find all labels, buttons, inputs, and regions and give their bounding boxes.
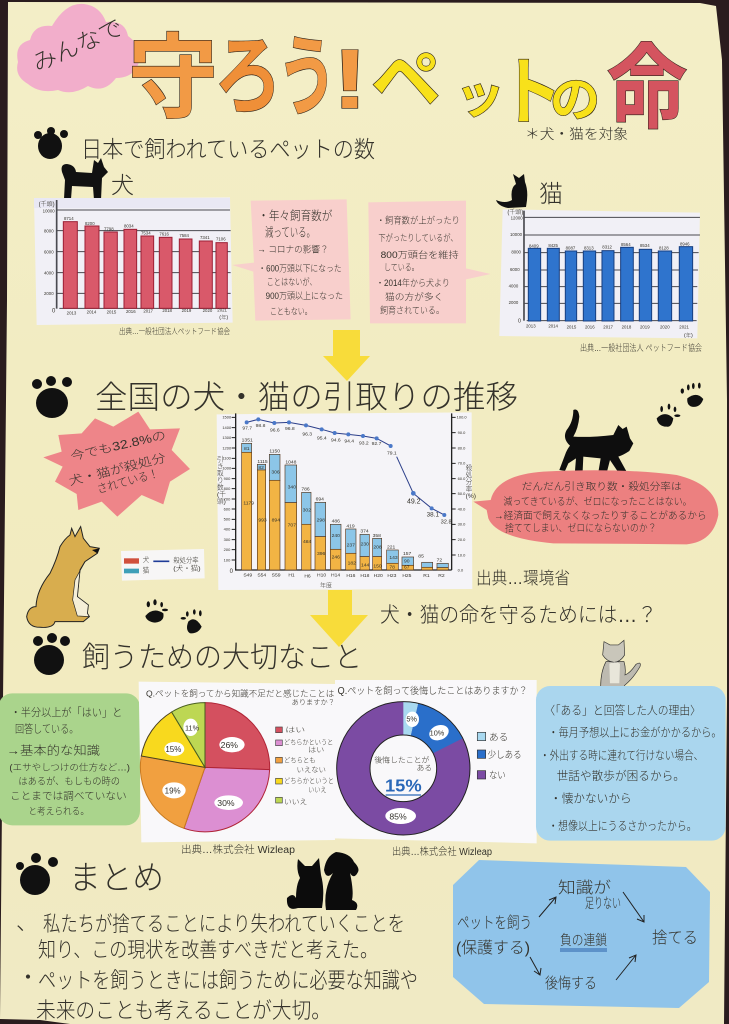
title: 守ろう!ペットの命: 命 xyxy=(607,38,687,140)
panel: donut chart regret: 少しある xyxy=(488,750,522,761)
title: 守ろう!ペットの命: ッ xyxy=(455,70,505,123)
chart value labels: R1 xyxy=(423,573,430,579)
chart value labels: 60.0 xyxy=(458,476,466,481)
dog chart labels: 7798 xyxy=(104,226,114,231)
panel: green commentary: と考えられる。 xyxy=(28,806,89,817)
title cloud: みんなで: みんなで xyxy=(28,14,127,77)
note: dog commentary: 900万頭以上になった xyxy=(266,291,343,301)
dog chart labels: 10000 xyxy=(43,209,55,214)
dog chart labels: 2014 xyxy=(87,310,97,315)
chart value labels: 頭) xyxy=(217,498,226,506)
cat chart labels: 8534 xyxy=(640,243,650,248)
cat chart labels: 8946 xyxy=(680,241,690,246)
chart value labels: 157 xyxy=(403,551,412,557)
panel: pie chart knowledge: 30% xyxy=(217,798,235,808)
chart value labels: 0.0 xyxy=(458,567,464,572)
cat chart labels: 2017 xyxy=(603,325,614,330)
chart value labels: 246 xyxy=(332,554,340,560)
chart value labels: 70.0 xyxy=(458,461,466,466)
panel: donut chart regret: ない xyxy=(489,771,506,782)
text: summary: ・ xyxy=(17,965,39,990)
chart value labels: H23 xyxy=(387,573,397,579)
chart value labels: 700 xyxy=(224,496,231,501)
text: summary: 未来のことも考えることが大切。 xyxy=(36,998,331,1023)
panel: green commentary xyxy=(0,693,140,825)
heading: 日本で飼われているペットの数: 日本で飼われているペットの数 xyxy=(81,136,375,162)
chart value labels: 率 xyxy=(466,485,473,493)
panel: pie chart knowledge: 19% xyxy=(165,787,181,796)
chart value labels: 1500 xyxy=(222,415,232,420)
chart value labels: 92.7 xyxy=(372,441,382,447)
chart value labels: 95.4 xyxy=(317,436,327,442)
chart value labels: 72 xyxy=(437,558,442,564)
chart value labels: 374 xyxy=(360,529,369,535)
cat chart labels: 0 xyxy=(518,318,521,324)
chart value labels: 引 xyxy=(217,455,224,464)
dog chart labels: 8000 xyxy=(44,228,54,233)
illustration: grey cat xyxy=(601,640,640,687)
chart value labels: H16 xyxy=(346,573,356,579)
callout: salmon speech bubble: だんだん引き取り数・殺処分率は xyxy=(522,480,682,493)
source: dogs: 出典…一般社団法人ペットフード協会 xyxy=(119,326,230,336)
cat chart labels: 8087 xyxy=(566,245,576,250)
chart value labels: 50.0 xyxy=(458,491,466,496)
dog chart labels: 2020 xyxy=(203,308,213,313)
chart value labels: H20 xyxy=(374,573,383,579)
callout: salmon speech bubble: →経済面で飼えなくなったりすることがあるから xyxy=(494,510,707,522)
cat chart labels: 10000 xyxy=(510,232,523,237)
source: ministry of environment: 出典…環境省 xyxy=(476,569,570,588)
chart value labels: 419 xyxy=(346,523,355,529)
chart value labels: 96.3 xyxy=(302,432,312,438)
panel: donut chart regret: ある xyxy=(489,732,508,743)
chart value labels: 694 xyxy=(316,497,324,503)
chart value labels: 298 xyxy=(317,518,325,524)
chart value labels: 90 xyxy=(404,558,410,564)
chart value labels: 300 xyxy=(224,537,231,542)
donut chart xyxy=(353,718,453,818)
callout: starburst 32.8%: 今でも32.8%の xyxy=(69,428,167,464)
heading: 飼うための大切なこと: 飼うための大切なこと xyxy=(82,641,362,674)
text: summary: ペットを飼うときには飼うために必要な知識や xyxy=(38,968,418,993)
chart value labels: 1300 xyxy=(222,435,232,440)
chart value labels: 500 xyxy=(224,517,231,522)
chart value labels: 82 xyxy=(258,465,264,471)
panel: pie chart knowledge: はい xyxy=(308,746,325,754)
text: summary: 、 xyxy=(16,910,38,935)
chart value labels: 0 xyxy=(230,569,234,575)
chart value labels: 100.0 xyxy=(457,415,467,420)
pie chart xyxy=(140,703,270,832)
icon: small paws top right xyxy=(657,383,703,427)
dog chart labels: (年) xyxy=(219,313,228,321)
panel: green commentary: 回答している。 xyxy=(15,722,78,736)
panel: donut chart regret: 5% xyxy=(406,715,417,724)
chart value labels: R2 xyxy=(438,573,445,579)
title: 守ろう!ペットの命: う xyxy=(277,28,337,127)
icon: black cat silhouette xyxy=(496,174,527,208)
panel: pie chart knowledge: いえない xyxy=(297,766,326,774)
chart value labels: 32.8 xyxy=(441,520,452,526)
dog chart labels: (千頭) xyxy=(39,200,55,208)
icon: paw 4 xyxy=(16,853,58,895)
chart value labels: 80.0 xyxy=(458,445,466,450)
dog chart labels: 8200 xyxy=(85,221,95,226)
note: cat commentary: 800万頭台を維持 xyxy=(381,249,459,260)
dog chart labels: 2019 xyxy=(182,308,192,313)
chart value labels: 取 xyxy=(217,470,224,478)
chart value labels xyxy=(217,415,476,589)
icon: paw 1 xyxy=(34,127,68,159)
chart value labels: 1100 xyxy=(222,456,232,461)
chart value labels: 230 xyxy=(361,542,369,548)
label: 犬: 犬 xyxy=(111,172,134,198)
chart value labels: 81 xyxy=(244,446,250,452)
note: dog commentary: ・年々飼育数が xyxy=(258,209,332,223)
cat chart labels: 2019 xyxy=(640,325,650,330)
chart value labels: 484 xyxy=(303,539,312,545)
cycle arrows xyxy=(530,892,644,980)
dog chart labels: 2013 xyxy=(67,311,77,316)
dog bars xyxy=(63,222,227,308)
panel: green commentary: →基本的な知識 xyxy=(7,743,100,758)
dog chart labels: 2000 xyxy=(44,291,54,296)
sources: Wizleap xyxy=(181,843,492,858)
illustration: shiba dog xyxy=(27,527,99,627)
panel: pie chart knowledge: いいえ xyxy=(284,798,307,806)
title: 守ろう!ペットの命: ! xyxy=(332,32,368,126)
sources: Wizleap: 出典…株式会社 Wizleap xyxy=(181,843,295,856)
chart value labels: S54 xyxy=(257,572,266,578)
panel: green commentary: ・半分以上が「はい」と xyxy=(11,706,122,719)
callout: salmon speech bubble xyxy=(473,470,718,544)
heading: まとめ: まとめ xyxy=(69,859,164,896)
chart value labels: 900 xyxy=(224,476,231,481)
chart value labels: 67 xyxy=(404,564,410,570)
chart value labels: 分 xyxy=(466,478,473,486)
title: 守ろう!ペットの命: ろ xyxy=(214,29,282,125)
title: 守ろう!ペットの命: ト xyxy=(500,51,562,134)
chart value labels: 78 xyxy=(389,564,395,570)
cat chart labels: 8128 xyxy=(659,245,669,250)
note: 犬・猫を対象: ＊犬・猫を対象 xyxy=(525,126,628,142)
icon: paw 2 xyxy=(32,376,72,418)
chart value labels: 殺 xyxy=(466,463,473,472)
panel: pie chart knowledge: はい xyxy=(285,726,306,734)
chart value labels: 486 xyxy=(332,519,340,525)
dog chart labels: 4000 xyxy=(44,270,54,275)
dog chart labels: 2017 xyxy=(143,308,154,313)
callout: starburst 32.8%: されている！ xyxy=(95,466,160,496)
text: summary xyxy=(16,910,418,1023)
dog chart labels: 7106 xyxy=(216,236,226,241)
callout: salmon speech bubble: 減ってきているが、ゼロになったことはない。 xyxy=(503,496,692,508)
heading: 全国の犬・猫の引取りの推移: 全国の犬・猫の引取りの推移 xyxy=(95,379,518,415)
cat chart labels: 2013 xyxy=(526,324,536,329)
note: dog commentary: → コロナの影響？ xyxy=(257,244,329,255)
cat bars xyxy=(528,247,693,321)
callout: starburst 32.8%: 犬・猫が殺処分 xyxy=(67,450,167,488)
chart value labels: S49 xyxy=(243,572,252,578)
panel: vicious cycle: 知識が xyxy=(558,879,611,897)
panel: pie chart knowledge: Q.ペットを飼ってから知識不足だと感じたことは xyxy=(146,688,335,699)
chart value labels: H14 xyxy=(331,572,340,578)
chart value labels: 10.0 xyxy=(458,552,466,557)
chart value labels: り xyxy=(217,477,224,485)
panel: reasons blue box xyxy=(536,686,726,841)
title: 守ろう!ペットの命: の xyxy=(550,74,600,127)
arrow: yellow down 1 xyxy=(323,330,370,381)
note: dog commentary xyxy=(232,199,351,321)
chart value labels: 600 xyxy=(224,506,231,511)
panel: green commentary: (エサやしつけの仕方など…) xyxy=(9,762,130,773)
cat chart labels: 8312 xyxy=(602,245,613,250)
panel: vicious cycle: 足りない xyxy=(585,895,621,911)
chart value labels: 85 xyxy=(418,554,424,560)
chart value labels: 340 xyxy=(288,484,296,490)
chart value labels: 707 xyxy=(288,523,296,529)
panel: pie chart knowledge: どちらかというと xyxy=(284,739,333,747)
cat chart labels: 2020 xyxy=(660,325,670,330)
chart value labels: き xyxy=(217,463,224,471)
line and stacked bar chart: withdrawals xyxy=(217,412,476,590)
chart value labels: 1200 xyxy=(222,445,232,450)
icon: black dog silhouette xyxy=(62,158,108,200)
note: dog commentary: こともない。 xyxy=(270,307,312,317)
donut labels: 後悔したことが xyxy=(374,754,430,764)
dog chart labels: 0 xyxy=(52,309,56,315)
dog chart labels: 2021 xyxy=(217,307,228,312)
illustration: cat and dog silhouettes xyxy=(287,852,358,910)
note: dog commentary: 減っている。 xyxy=(265,226,315,240)
chart value labels: 97.7 xyxy=(242,425,252,431)
chart value labels: 182 xyxy=(348,560,356,566)
chart value labels: 20.0 xyxy=(458,537,466,542)
note: cat commentary: している。 xyxy=(384,263,419,273)
chart value labels: (%) xyxy=(466,493,476,500)
panel: pie chart knowledge: どちらとも xyxy=(284,756,316,764)
sources: Wizleap: 出典…株式会社 Wizleap xyxy=(392,845,492,858)
note: cat commentary xyxy=(368,201,491,323)
panel: reasons blue box: 〈「ある」と回答した人の理由〉 xyxy=(544,703,701,717)
chart value labels: 1150 xyxy=(269,449,280,455)
chart value labels: 年度 xyxy=(320,581,332,589)
chart value labels: 396 xyxy=(317,551,326,557)
panel: reasons blue box: ・懐かないから xyxy=(550,792,632,806)
chart value labels: 400 xyxy=(224,527,231,532)
cat chart labels: 8425 xyxy=(548,243,559,248)
chart value labels: 90.0 xyxy=(458,430,466,435)
chart value labels: 1351 xyxy=(242,438,253,444)
cat chart labels: 2018 xyxy=(622,325,632,330)
label: 猫: 猫 xyxy=(539,181,563,208)
chart value labels: H25 xyxy=(402,573,412,579)
panel: donut chart regret xyxy=(335,680,537,843)
chart value labels: H10 xyxy=(317,572,326,578)
panel: vicious cycle: (保護する) xyxy=(456,939,530,957)
chart value labels: 800 xyxy=(224,486,231,491)
cat chart labels: 12000 xyxy=(511,215,523,220)
cat chart labels: 2014 xyxy=(548,324,559,329)
cat chart labels: 8564 xyxy=(621,242,631,247)
note: cat commentary: ・2014年から犬より xyxy=(376,277,450,288)
panel: pie chart knowledge: いいえ xyxy=(308,786,327,794)
dog chart labels: 7616 xyxy=(159,232,170,237)
cat chart labels: (年) xyxy=(684,331,693,339)
donut legend xyxy=(477,732,486,779)
chart value labels: 1048 xyxy=(285,460,297,466)
cat chart labels xyxy=(507,208,693,339)
chart value labels: 数 xyxy=(217,483,224,492)
bar chart: dogs xyxy=(34,197,233,325)
chart value labels: 221 xyxy=(387,544,396,550)
legend: withdrawals chart: 犬 xyxy=(143,555,150,564)
dog chart labels xyxy=(39,200,228,321)
dog chart labels: 2016 xyxy=(126,309,136,314)
chart value labels: H18 xyxy=(360,573,370,579)
title: 守ろう!ペットの命: 守 xyxy=(128,28,218,130)
legend: withdrawals chart: (犬・猫) xyxy=(173,564,201,573)
icon: small paws center left xyxy=(145,599,202,633)
donut labels xyxy=(374,754,432,796)
cat chart labels: 2021 xyxy=(679,325,690,330)
panel: donut chart regret: 85% xyxy=(389,811,407,821)
chart value labels: 302 xyxy=(303,508,311,514)
arrow: yellow down 2 xyxy=(310,590,368,647)
dog chart labels: 6000 xyxy=(44,249,54,254)
chart value labels: 1400 xyxy=(222,425,232,430)
chart value labels: 79.1 xyxy=(387,450,397,456)
chart value labels: 786 xyxy=(301,487,310,493)
chart value labels: 1000 xyxy=(222,466,232,471)
dog chart labels: 7341 xyxy=(200,235,210,240)
chart value labels: 144 xyxy=(361,562,370,568)
panel: green commentary: ことまでは調べていない xyxy=(10,790,127,802)
chart value labels: 1115 xyxy=(257,459,268,465)
chart value labels: 894 xyxy=(272,518,280,524)
chart value labels: 処 xyxy=(466,470,473,479)
note: dog commentary: ・600万頭以下になった xyxy=(258,263,342,273)
panel: reasons blue box: 世話や散歩が困るから。 xyxy=(557,770,685,783)
subheading: 犬・猫の命を守るためには: 犬・猫の命を守るためには…？ xyxy=(380,604,657,627)
chart value labels: 96.8 xyxy=(285,426,295,432)
cat chart labels: 4000 xyxy=(509,284,519,289)
legend: withdrawals chart xyxy=(121,549,205,581)
chart value labels: 96.6 xyxy=(270,427,280,433)
dog chart labels: 8714 xyxy=(64,216,74,221)
panel: green commentary: はあるが、もしもの時の xyxy=(18,776,120,788)
panel: pie chart knowledge: 11% xyxy=(185,723,200,732)
panel: pie chart knowledge: どちらかというと xyxy=(284,777,334,785)
dog chart labels: 7534 xyxy=(141,231,151,236)
panel: donut chart regret: 10% xyxy=(430,728,445,737)
chart value labels: 208 xyxy=(373,544,382,550)
panel: donut chart regret: Q.ペットを飼って後悔したことはありますか？ xyxy=(338,685,528,697)
cat chart labels: 2000 xyxy=(509,300,519,305)
chart value labels: 240 xyxy=(332,533,340,539)
note: cat commentary: 飼育されている。 xyxy=(380,305,444,315)
stacked bars: cats (blue) over dogs (orange) xyxy=(242,443,448,570)
panel: vicious cycle: 捨てる xyxy=(652,929,698,947)
cat chart labels: 6000 xyxy=(510,267,520,272)
pie legend xyxy=(276,727,282,803)
chart value labels: 143 xyxy=(389,555,398,561)
cat chart labels: (千頭) xyxy=(507,208,523,216)
chart value labels: 38.1 xyxy=(427,512,439,519)
chart value labels: 993 xyxy=(258,518,267,524)
cat chart labels: 2016 xyxy=(585,325,595,330)
panel: pie chart knowledge xyxy=(139,682,335,842)
panel: vicious cycle: 後悔する xyxy=(545,975,597,992)
panel: pie chart knowledge: 26% xyxy=(221,740,238,750)
chart value labels: 93.2 xyxy=(359,441,369,447)
text: summary: 知り、この現状を改善すべきだと考えた。 xyxy=(38,939,378,962)
note: dog commentary: ことはないが、 xyxy=(267,276,317,287)
dog chart labels: 7584 xyxy=(179,233,190,238)
legend: withdrawals chart: 殺処分率 xyxy=(173,555,199,564)
panel: pie chart knowledge: ありますか？ xyxy=(292,699,335,707)
chart value labels: 98.8 xyxy=(256,423,266,429)
dog chart labels: 2015 xyxy=(107,309,117,314)
panel: pie chart knowledge: 15% xyxy=(165,745,181,754)
note: cat commentary: 猫の方が多く xyxy=(385,291,443,302)
chart value labels: 30.0 xyxy=(458,522,466,527)
dog chart labels: 2018 xyxy=(162,308,173,313)
chart value labels: 150 xyxy=(373,563,382,569)
cat chart labels: 8313 xyxy=(584,245,594,250)
donut labels: ある xyxy=(417,764,432,773)
chart value labels: S59 xyxy=(272,572,281,578)
chart value labels: 100 xyxy=(224,557,231,562)
chart value labels: 1179 xyxy=(243,500,254,506)
chart value labels: H1 xyxy=(288,572,295,578)
bar chart: cats xyxy=(499,208,700,339)
callout: salmon speech bubble: 捨ててしまい、ゼロにならないのか？ xyxy=(505,522,657,535)
chart value labels: 49.2 xyxy=(407,498,421,505)
chart value labels: 358 xyxy=(373,533,381,539)
legend: withdrawals chart: 猫 xyxy=(143,566,150,575)
chart value labels: 306 xyxy=(271,470,280,476)
cat chart labels: 8000 xyxy=(511,249,522,254)
cat chart labels: 8409 xyxy=(529,243,539,248)
title: 守ろう!ペットの命: ペ xyxy=(371,43,441,119)
chart value labels: 94.6 xyxy=(331,438,341,444)
donut labels: 15% xyxy=(385,776,422,796)
note: cat commentary: ・飼育数が上がったり xyxy=(377,214,460,225)
chart value labels: (千 xyxy=(217,491,226,499)
chart value labels: 40.0 xyxy=(458,506,466,511)
panel: vicious cycle: ペットを飼う xyxy=(457,914,532,932)
chart value labels: H6 xyxy=(304,574,311,580)
illustration: black cat walking xyxy=(559,410,633,473)
rate line xyxy=(245,417,446,517)
dog chart labels: 8034 xyxy=(124,224,134,229)
panel: reasons blue box: ・想像以上にうるさかったから。 xyxy=(548,820,697,833)
chart value labels: 237 xyxy=(347,543,355,549)
chart value labels: 94.4 xyxy=(344,438,354,444)
note: cat commentary: 下がったりしているが、 xyxy=(378,232,458,243)
callout: starburst 32.8% xyxy=(43,412,190,517)
text: summary: 私たちが捨てることにより失われていくことを xyxy=(43,913,405,936)
cat chart labels: 2015 xyxy=(567,325,577,330)
title cloud: みんなで xyxy=(17,4,140,92)
title: 守ろう!ペットの命 xyxy=(128,28,687,140)
panel: vicious cycle: 負の連鎖 xyxy=(560,932,607,948)
icon: paw 3 xyxy=(33,633,70,675)
chart value labels: 200 xyxy=(224,547,231,552)
panel: vicious cycle xyxy=(453,860,710,1008)
